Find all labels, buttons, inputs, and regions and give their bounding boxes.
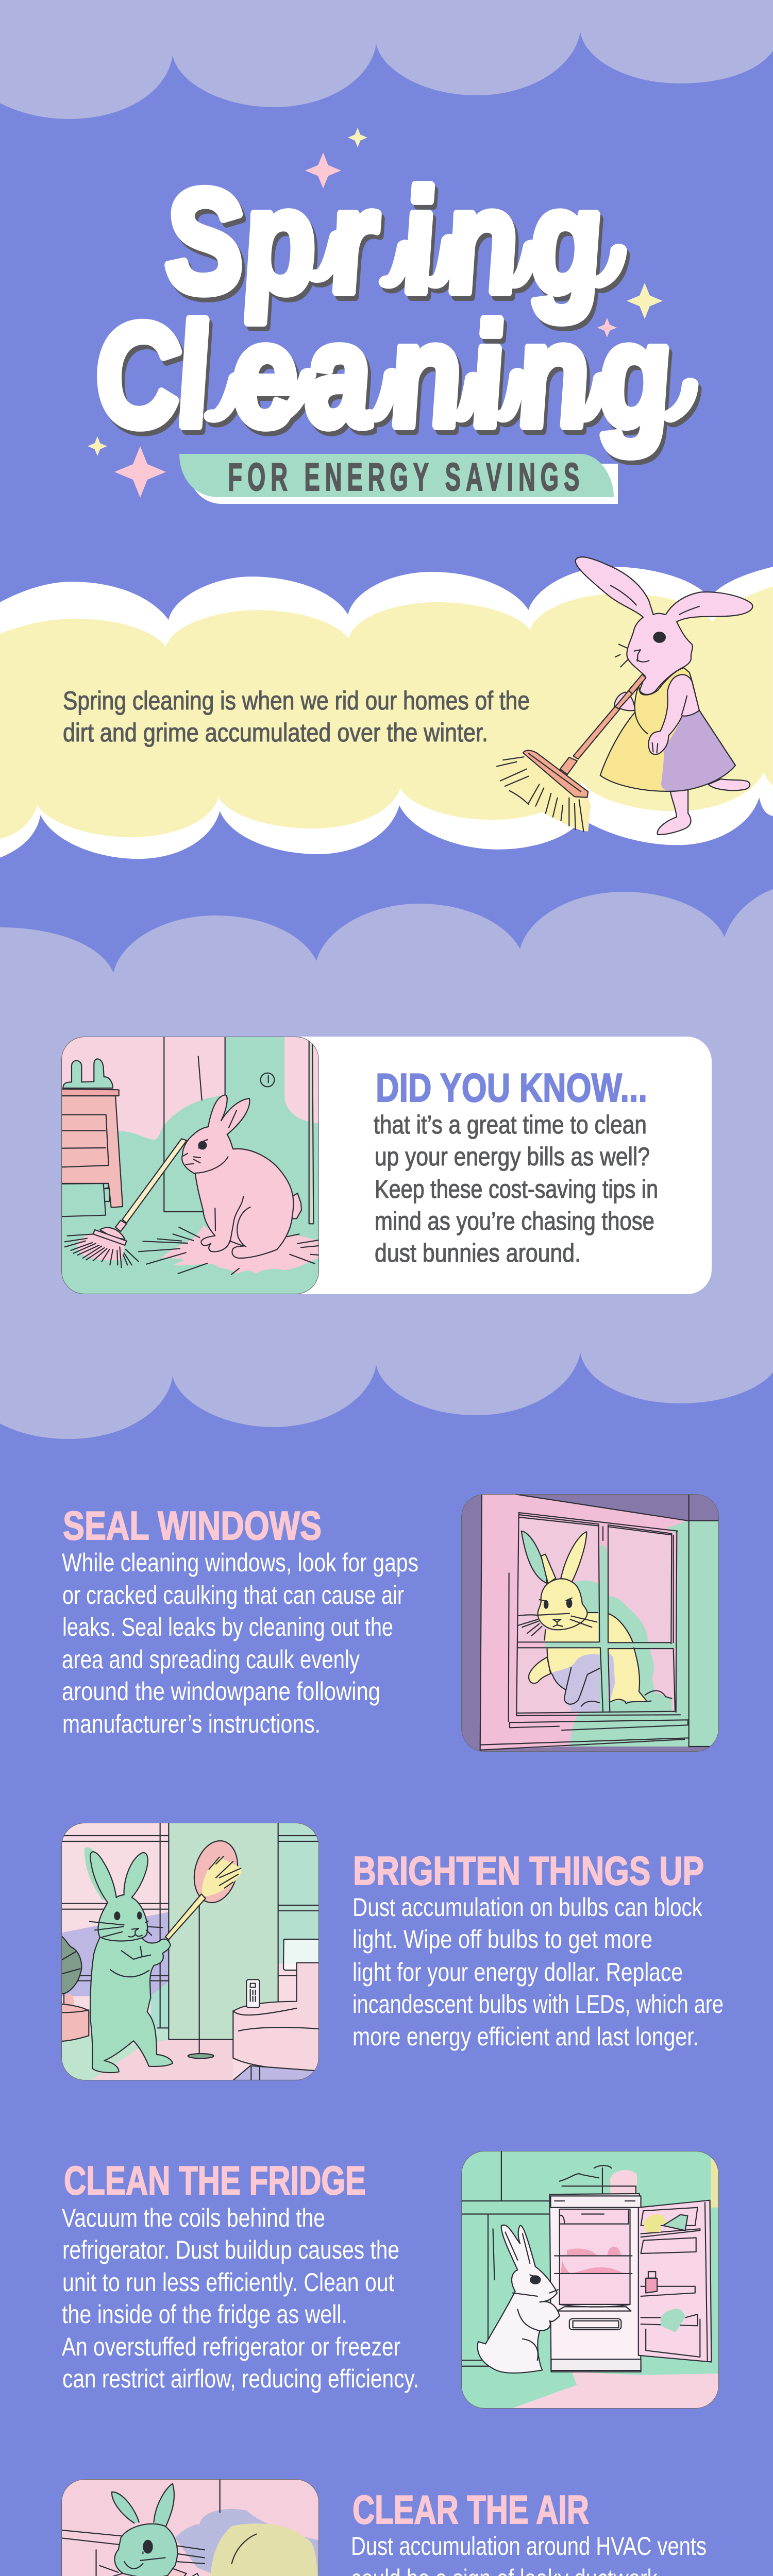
- title: Cleaning: [88, 293, 677, 457]
- subtitle banner: FOR ENERGY SAVINGS: [228, 455, 579, 499]
- text block: seal windows: manufacturer’s instructions.: [62, 1709, 321, 1738]
- text block: clean the fridge: [62, 2204, 419, 2393]
- text block: seal windows: area and spreading caulk evenly: [62, 1645, 360, 1674]
- illustration: bunny cleaning fridge: [459, 2148, 725, 2411]
- text block: did you know: mind as you’re chasing those: [375, 1207, 654, 1235]
- text block: brighten things up: Dust accumulation on bulbs can block: [352, 1893, 703, 1922]
- text block: seal windows: around the windowpane following: [62, 1677, 380, 1706]
- illustration: bunny dusting light bulb: [61, 1823, 319, 2080]
- lavender cloud band: [0, 889, 773, 1439]
- title: [88, 159, 693, 462]
- text block: clean the fridge: Vacuum the coils behind the: [62, 2204, 325, 2232]
- heading: clear the air: CLEAR THE AIR: [352, 2487, 589, 2532]
- title: Cleaning: [91, 298, 680, 462]
- text block: clear the air: [351, 2532, 713, 2576]
- text block: seal windows: or cracked caulking that can cause air: [62, 1581, 404, 1609]
- text block: clean the fridge: unit to run less efficiently. Clean out: [62, 2268, 394, 2297]
- text block: seal windows: leaks. Seal leaks by cleaning out the: [62, 1613, 393, 1641]
- illustration: pink bunny sweeping: [497, 557, 752, 835]
- title: Spring: [161, 164, 611, 328]
- intro text: dirt and grime accumulated over the winter.: [63, 718, 488, 747]
- text block: clean the fridge: An overstuffed refrigerator or freezer: [62, 2332, 400, 2361]
- text block: clean the fridge: the inside of the fridge as well.: [62, 2300, 347, 2329]
- top lavender cloud: [0, 0, 773, 119]
- text block: brighten things up: light for your energy dollar. Replace: [352, 1958, 683, 1987]
- intro text: [63, 686, 530, 747]
- intro text: Spring cleaning is when we rid our homes of the: [63, 686, 530, 715]
- text block: did you know: dust bunnies around.: [375, 1239, 581, 1267]
- text block: brighten things up: [352, 1893, 724, 2051]
- text block: clean the fridge: refrigerator. Dust buildup causes the: [62, 2235, 399, 2264]
- intro cloud band: [0, 567, 773, 859]
- text block: did you know: that it’s a great time to clean: [374, 1110, 647, 1139]
- text block: clean the fridge: can restrict airflow, reducing efficiency.: [62, 2364, 419, 2393]
- text block: seal windows: [62, 1548, 418, 1738]
- illustration: bunny cleaning vent: [57, 2475, 323, 2576]
- text block: did you know: up your energy bills as well?: [375, 1142, 650, 1171]
- text block: brighten things up: more energy efficient and last longer.: [352, 2022, 699, 2051]
- text block: did you know: Keep these cost-saving tips in: [375, 1175, 658, 1204]
- text block: brighten things up: light. Wipe off bulbs to get more: [352, 1925, 652, 1954]
- heading: did you know: DID YOU KNOW...: [376, 1065, 647, 1110]
- text block: did you know: [374, 1110, 658, 1267]
- heading: seal windows: SEAL WINDOWS: [63, 1503, 322, 1548]
- sparkles: [88, 128, 663, 498]
- title: Spring: [158, 159, 608, 324]
- illustration: bunny with broom and dust: [61, 1037, 319, 1294]
- illustration: bunny in window: [461, 1494, 719, 1752]
- text block: seal windows: While cleaning windows, look for gaps: [62, 1548, 418, 1577]
- panel: did you know card: [61, 1037, 712, 1294]
- heading: clean the fridge: CLEAN THE FRIDGE: [64, 2158, 366, 2203]
